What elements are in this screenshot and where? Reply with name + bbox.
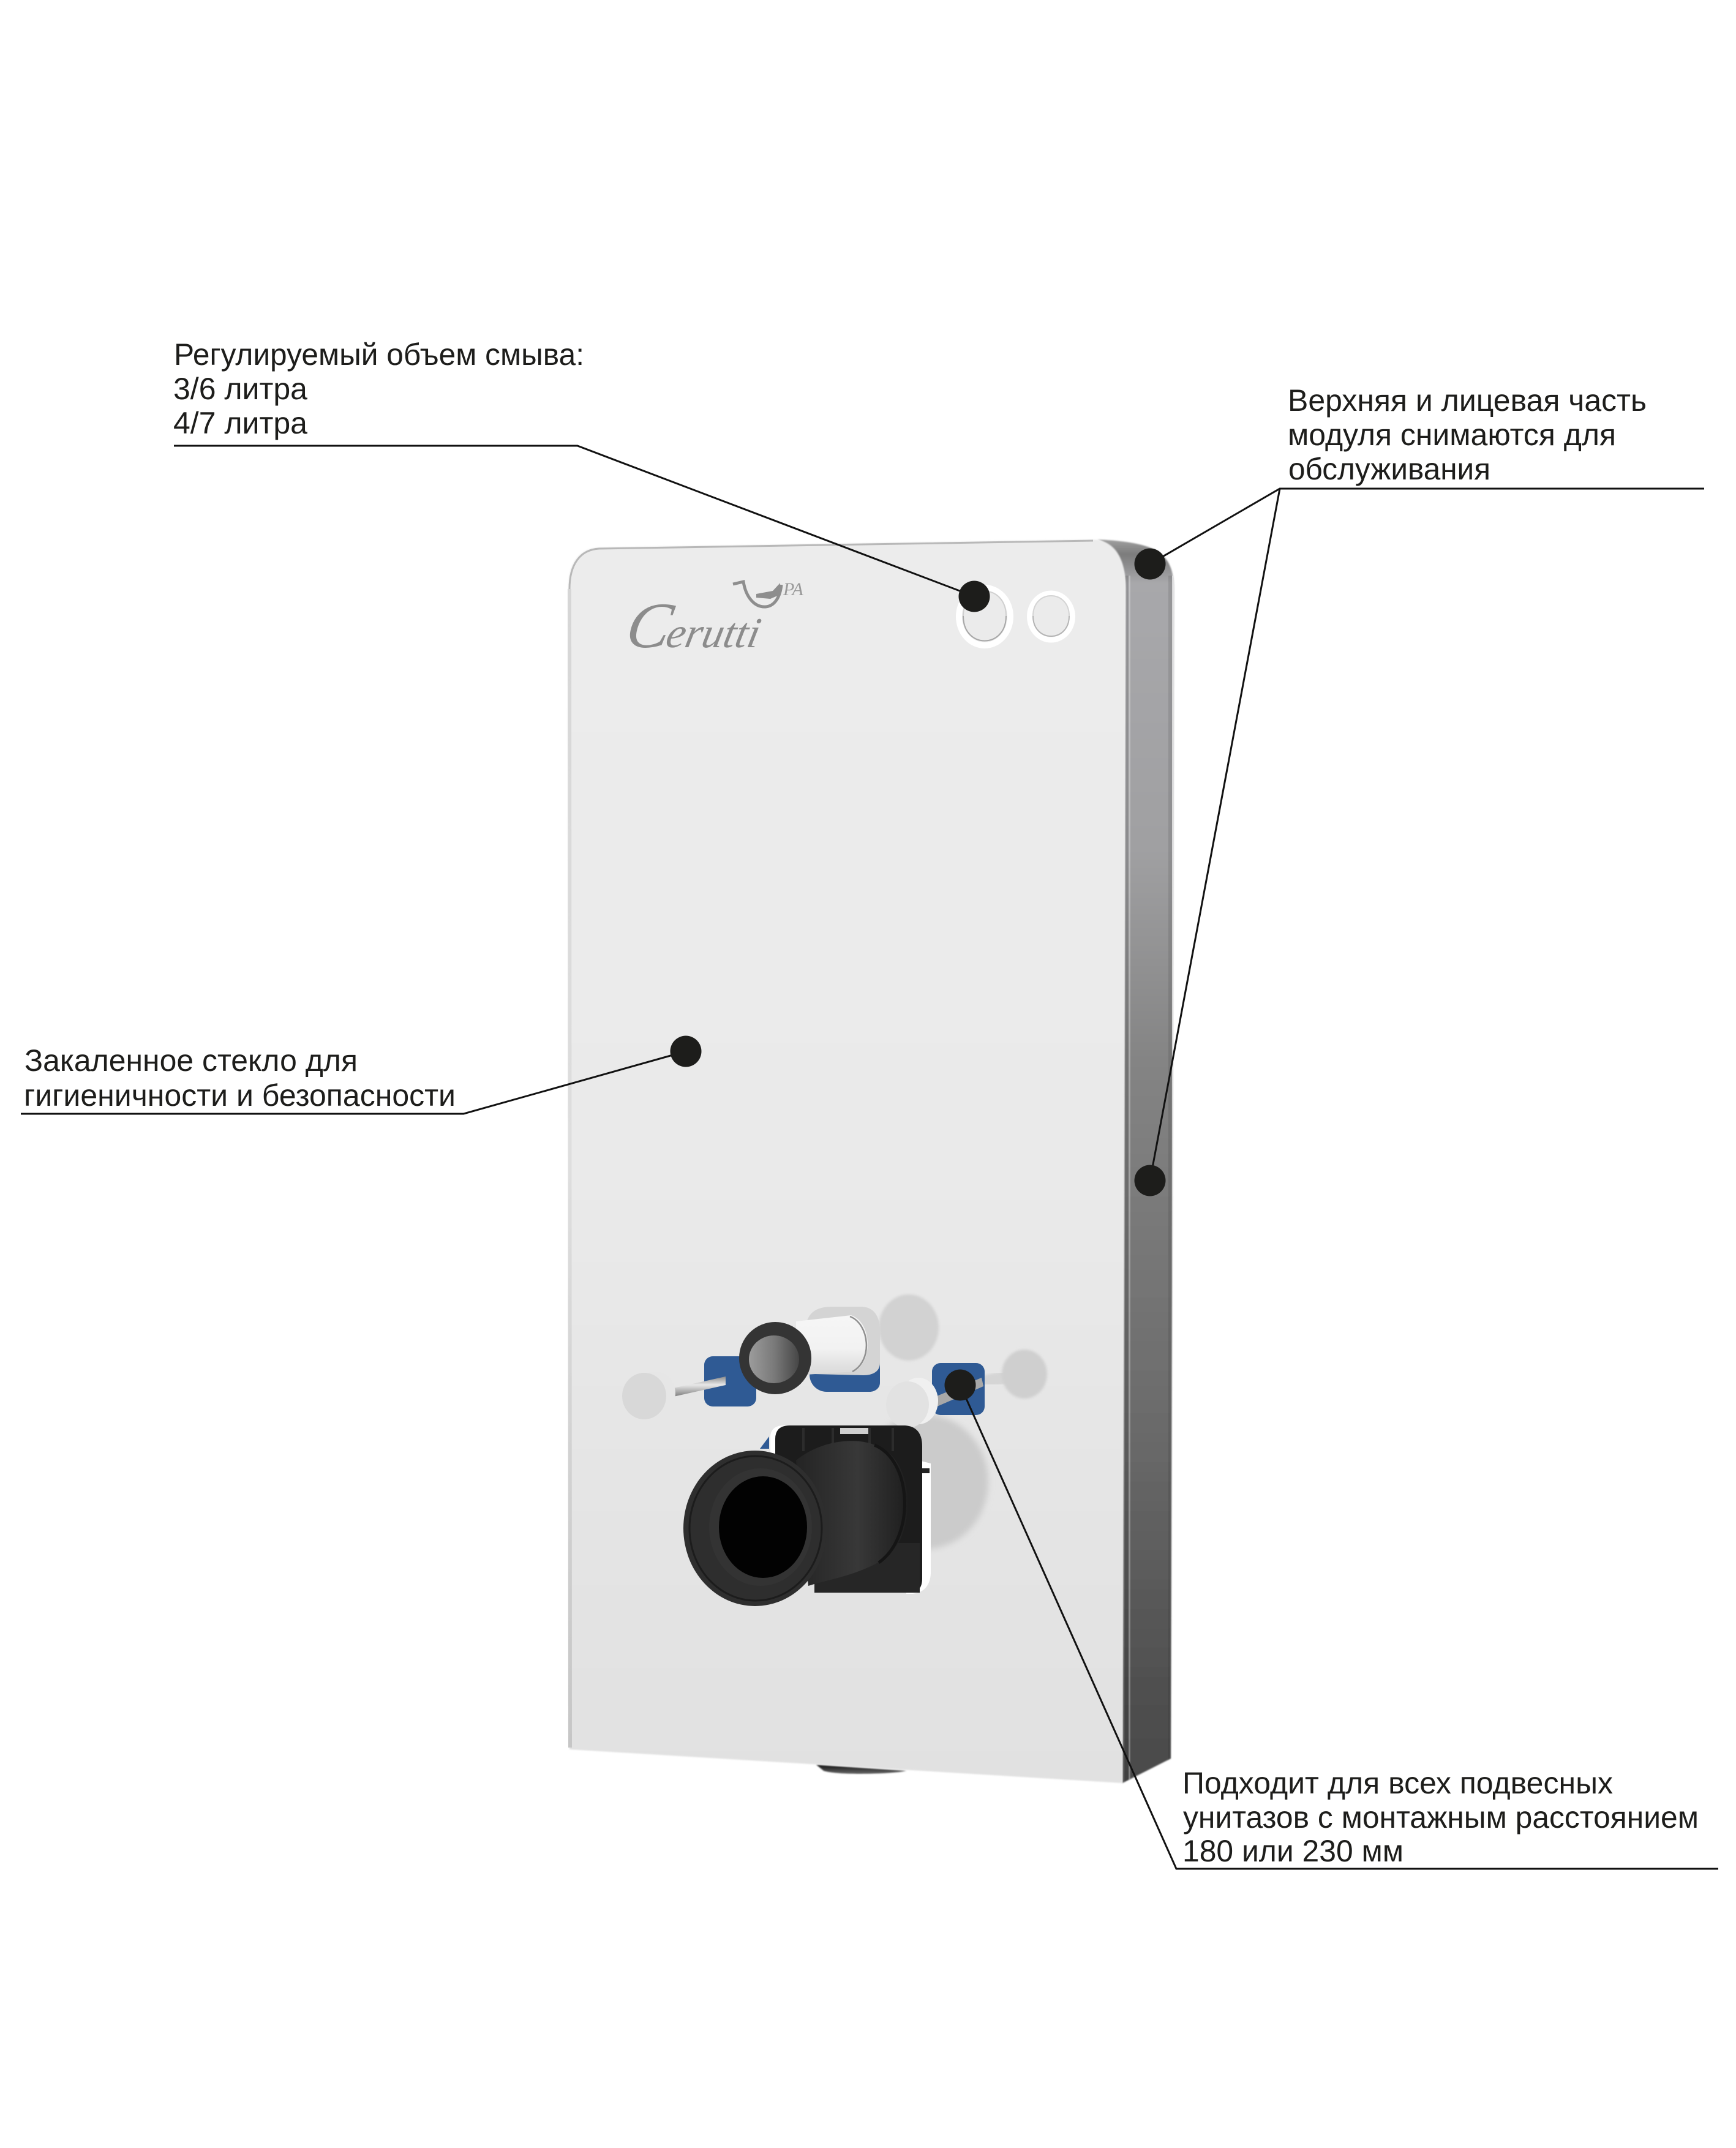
marker dot: flush button [959, 580, 990, 612]
right blue bracket [932, 1363, 985, 1415]
wall mounting hardware [622, 1294, 1047, 1606]
Cerutti logo: PA [783, 579, 803, 599]
text block: flush volume: Регулируемый объем смыва: [174, 337, 584, 372]
Cerutti logo [620, 579, 803, 662]
text block: tempered glass: Закаленное стекло для [24, 1043, 358, 1078]
shadows on glass [861, 1294, 1047, 1549]
white flush pipe [796, 1315, 868, 1375]
centre blue bracket [810, 1362, 880, 1392]
left stud knob [622, 1372, 675, 1419]
text block: mounting distance: унитазов с монтажным расстоянием [1183, 1800, 1699, 1834]
marker dot: mounting bracket [944, 1369, 976, 1401]
callout leader: mounting distance [960, 1385, 1718, 1869]
text block: removable panels: Верхняя и лицевая часть [1288, 383, 1647, 418]
small rubber gasket [739, 1322, 811, 1394]
tempered glass front face [568, 539, 1125, 1783]
module side face [1097, 539, 1174, 1788]
text block: mounting distance: 180 или 230 мм [1182, 1834, 1403, 1868]
text block: removable panels [1288, 383, 1647, 486]
right stud rod [934, 1378, 983, 1407]
callout leader: flush volume [174, 446, 974, 596]
callout leader: tempered glass [21, 1051, 686, 1114]
text block: removable panels: обслуживания [1288, 452, 1490, 486]
Cerutti logo: Cerutti [620, 590, 769, 662]
drain pipe foot under panel [816, 1765, 906, 1774]
text block: mounting distance: Подходит для всех подвесных [1182, 1766, 1613, 1800]
marker dot: glass [670, 1036, 702, 1067]
text block: tempered glass [24, 1043, 456, 1113]
glass edge highlights [569, 541, 1093, 1748]
flush button small [1030, 593, 1073, 640]
text block: mounting distance [1182, 1766, 1699, 1868]
left stud rod [671, 1376, 726, 1397]
drain outlet assembly [683, 1425, 931, 1606]
right stud knob [886, 1378, 938, 1428]
marker dot: top corner [1134, 549, 1166, 579]
installation module panel [568, 539, 1174, 1788]
text block: flush volume: 4/7 литра [173, 406, 307, 440]
flush pipe flange [806, 1307, 880, 1375]
callout leader: removable panels [1150, 489, 1704, 1181]
text block: flush volume [173, 337, 584, 440]
flush button large [959, 588, 1010, 645]
text block: flush volume: 3/6 литра [173, 372, 307, 406]
text block: removable panels: модуля снимаются для [1288, 418, 1616, 452]
marker dot: side face [1134, 1165, 1166, 1196]
left blue bracket [704, 1356, 756, 1406]
text block: tempered glass: гигиеничности и безопасности [24, 1078, 456, 1113]
